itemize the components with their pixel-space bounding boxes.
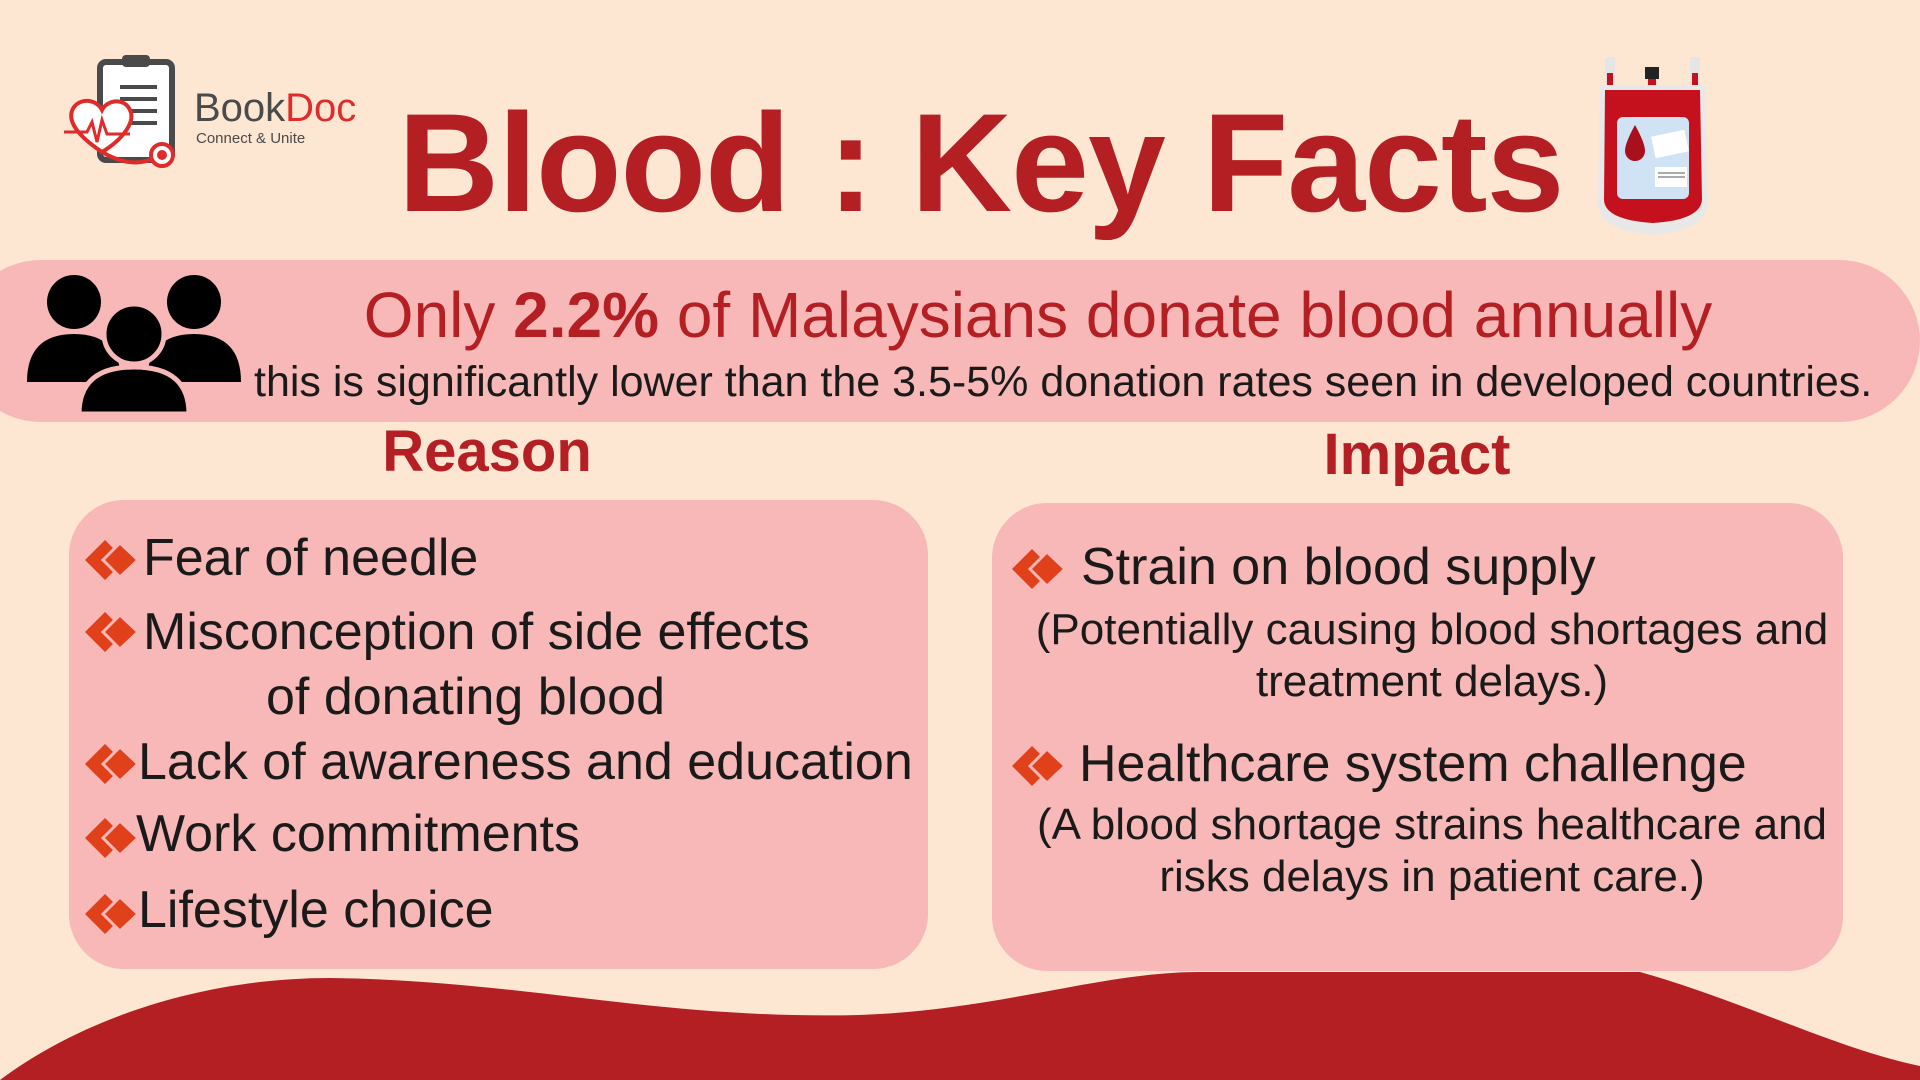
- icon: blood bag: [1598, 57, 1707, 235]
- panel: impact: [992, 503, 1843, 971]
- item: strain: treatment delays.): [1256, 657, 1608, 706]
- title: Blood : Key Facts: [398, 84, 1563, 241]
- logo: [64, 55, 356, 168]
- item: strain: Strain on blood supply: [1081, 538, 1596, 596]
- heading: reason: Reason: [382, 419, 592, 484]
- banner: [0, 260, 1920, 422]
- item: healthcare: Healthcare system challenge: [1079, 735, 1747, 793]
- item: misconception: Misconception of side effects: [143, 603, 810, 661]
- panel: reasons: [69, 500, 928, 969]
- item: healthcare: [1012, 735, 1827, 901]
- item: misconception: of donating blood: [266, 668, 665, 726]
- item: lifestyle: Lifestyle choice: [138, 881, 494, 939]
- icon: people: [27, 275, 241, 412]
- logo: BookDoc: [194, 86, 356, 130]
- item: awareness: Lack of awareness and education: [138, 733, 913, 791]
- item: healthcare: risks delays in patient care.): [1159, 852, 1705, 901]
- headline: Only 2.2% of Malaysians donate blood annually: [364, 279, 1712, 351]
- item: fear: Fear of needle: [143, 529, 478, 587]
- subline: this is significantly lower than the 3.5-5% donation rates seen in developed countries.: [254, 358, 1872, 406]
- item: work: Work commitments: [136, 805, 580, 863]
- item: misconception: [85, 603, 810, 726]
- item: strain: (Potentially causing blood shortages and: [1036, 605, 1828, 654]
- item: strain: [1012, 538, 1828, 706]
- heading: impact: Impact: [1324, 422, 1510, 487]
- logo: Connect & Unite: [196, 130, 305, 147]
- item: healthcare: (A blood shortage strains healthcare and: [1037, 800, 1827, 849]
